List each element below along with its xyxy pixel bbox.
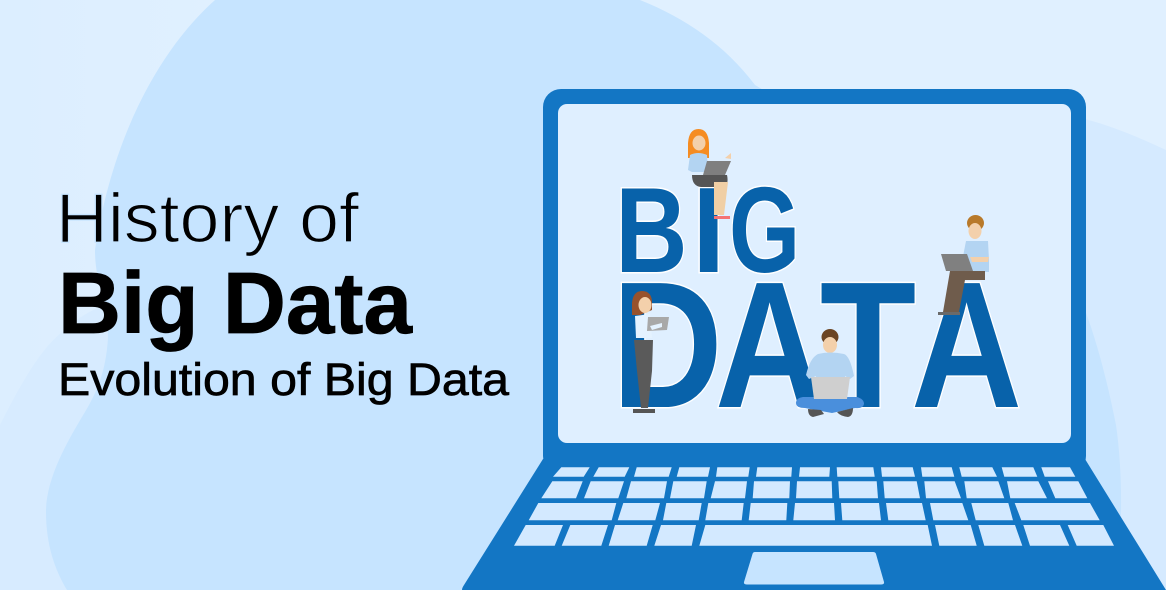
figure: woman with tablet — [632, 291, 669, 413]
background blob: lower left — [0, 300, 140, 590]
word: DATA: T — [820, 244, 916, 445]
word: DATA: A — [715, 246, 824, 446]
word: DATA: D — [612, 245, 723, 446]
figure: man cross-legged with laptop — [796, 329, 864, 417]
word: BIG: I — [692, 162, 726, 298]
word: DATA: A — [911, 245, 1022, 446]
trackpad — [744, 552, 884, 584]
figure: woman with laptop on BIG — [688, 129, 731, 219]
title: Big Data: Big Data — [58, 255, 413, 352]
word: BIG: G — [729, 161, 800, 298]
big lettering: BIG DATA — [612, 161, 1022, 446]
laptop lid — [543, 89, 1086, 474]
title: History of: History of — [56, 179, 360, 257]
figure: man with laptop on A — [938, 215, 989, 315]
keyboard — [514, 467, 1114, 546]
word: DATA — [612, 244, 1022, 446]
laptop — [462, 89, 1166, 590]
laptop screen — [558, 104, 1071, 443]
laptop base — [462, 459, 1166, 590]
word: BIG: B — [615, 162, 688, 298]
title block — [56, 179, 510, 405]
subtitle: Evolution of Big Data: Evolution of Big Data — [58, 354, 510, 405]
word: BIG — [615, 161, 800, 298]
background blob: right — [900, 119, 1166, 590]
